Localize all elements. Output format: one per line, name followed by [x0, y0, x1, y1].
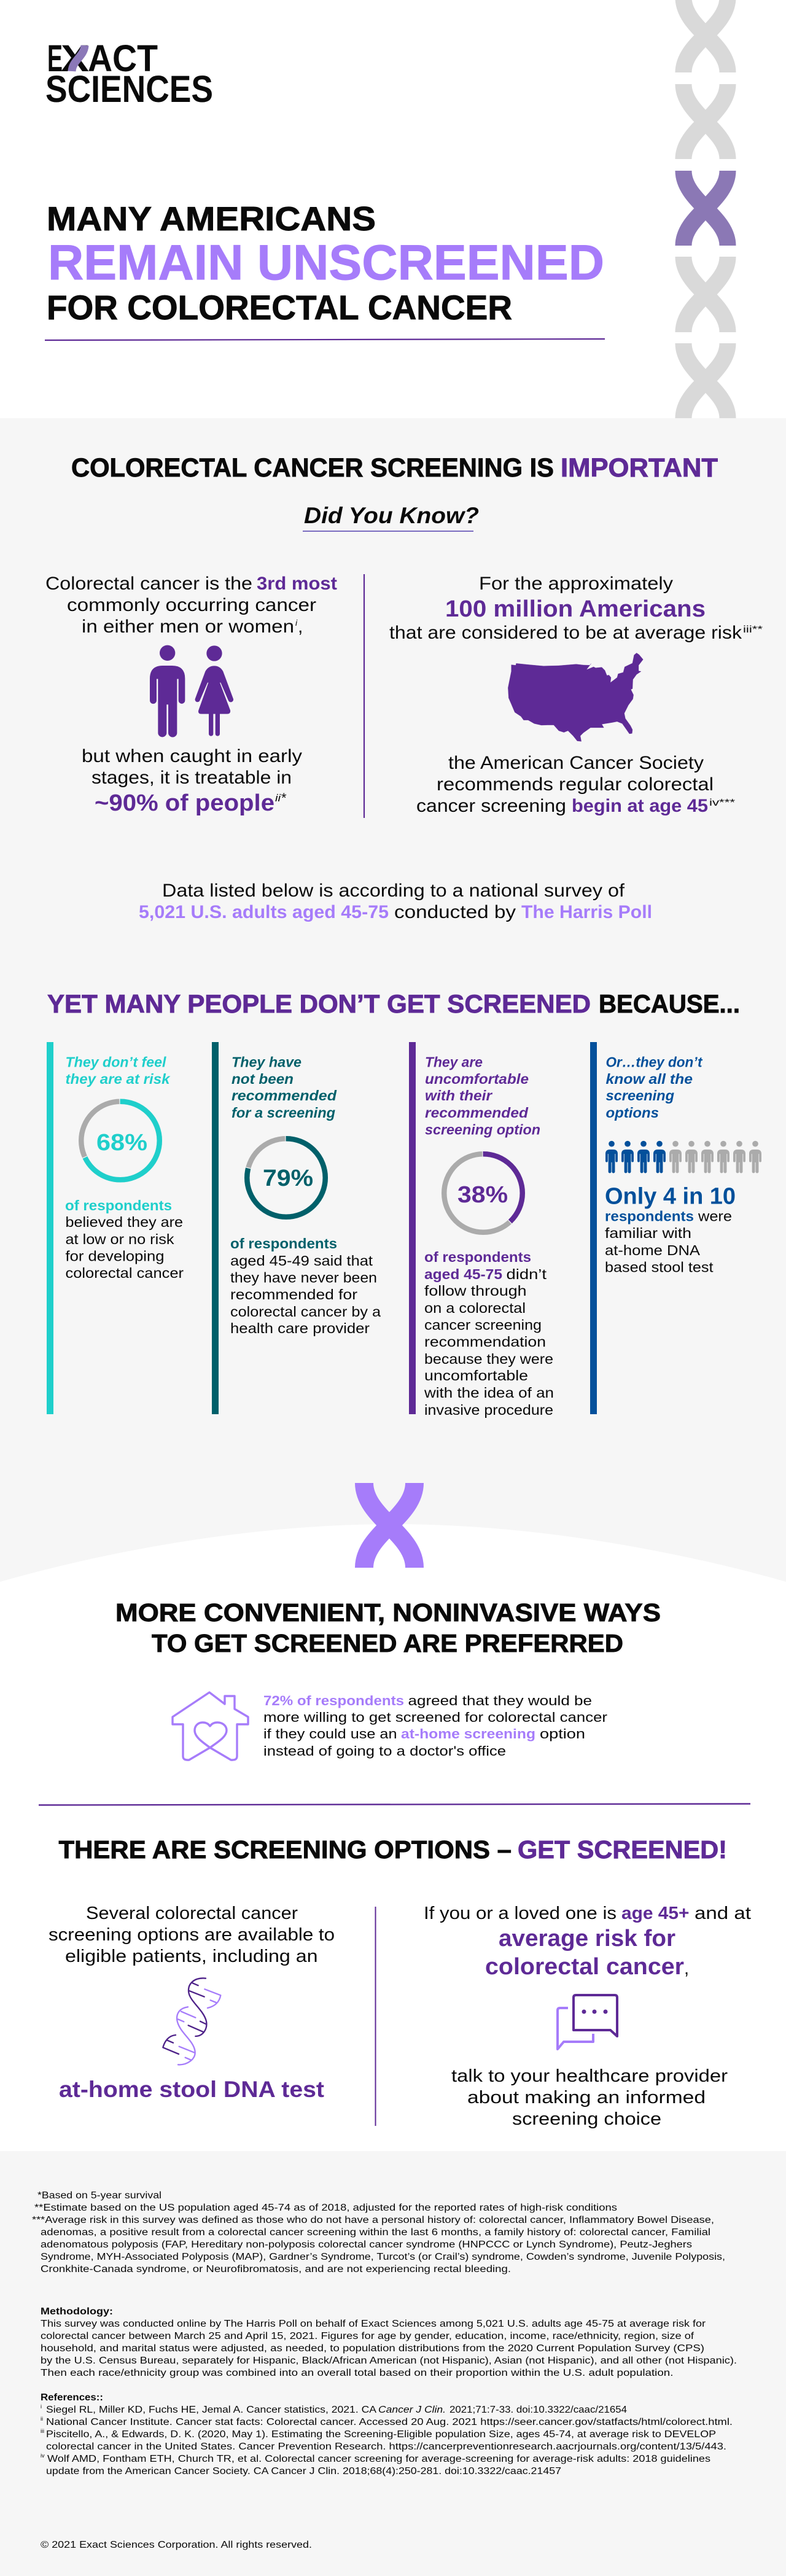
panel: not been recommended: colorectal cancer by a [230, 1304, 381, 1320]
footnotes [32, 2190, 725, 2274]
title [47, 200, 604, 327]
references: update from the American Cancer Society. CA Cancer J Clin. 2018;68(4):250-281. doi:10.3322/caac.21457 [46, 2466, 561, 2477]
text block: 72% of respondents: option [540, 1726, 585, 1741]
icon: DNA helix [163, 1978, 220, 2064]
panel: at-home stool DNA test: screening options are available to [49, 1925, 335, 1945]
panel: not been recommended: recommended for [230, 1286, 357, 1302]
text block: 72% of respondents: agreed that they would be [408, 1693, 592, 1708]
panel: don't know all options: Only 4 in 10 [605, 1184, 736, 1210]
panel: average risk facts: cancer screening [416, 796, 566, 816]
subheading: did you know: Did You Know? [304, 503, 479, 528]
footnotes: Cronkhite-Canada syndrome, or Neurofibromatosis, and are not experiencing rectal bleeding. [41, 2264, 511, 2274]
footnotes: ***Average risk in this survey was defined as those who do not have a personal history of: colorectal cancer, Inflammatory Bowel Disease, [32, 2215, 714, 2225]
panel: colorectal cancer facts [45, 574, 337, 816]
panel: uncomfortable with option: of respondents [424, 1249, 531, 1265]
panel: average risk facts: For the approximately [479, 574, 673, 594]
panel: uncomfortable with option: with the idea of an [424, 1385, 554, 1401]
panel: colorectal cancer facts: Colorectal cancer is the [45, 574, 252, 594]
logo: Exact Sciences: SCIENCES [45, 68, 213, 110]
panel: not been recommended: not been [232, 1071, 294, 1087]
text block: survey note: Data listed below is according to a national survey of [162, 881, 625, 901]
panel: don't know all options: screening [605, 1088, 674, 1103]
chart: 38% ring [444, 1154, 523, 1232]
chart: 79% ring [247, 1138, 325, 1217]
text block: survey note: conducted by [394, 902, 516, 922]
panel: they don't feel at risk: for developing [65, 1248, 165, 1264]
panel: don't know all options [590, 1042, 761, 1414]
panel: talk to your provider: age 45+ [621, 1904, 689, 1923]
panel: don't know all options: Or…they don’t [605, 1054, 703, 1070]
icon: US map [508, 653, 643, 741]
logo: Exact Sciences [45, 37, 213, 110]
panel: they don't feel at risk: They don’t feel [65, 1054, 166, 1070]
text block: survey note [139, 881, 652, 922]
panel: colorectal cancer facts: * [281, 790, 287, 806]
panel: uncomfortable with option: invasive procedure [424, 1402, 553, 1418]
panel: uncomfortable with option: recommended [425, 1105, 529, 1121]
footnotes: adenomatous polyposis (FAP, Hereditary non-polyposis colorectal cancer syndrome (HNPCCC or Lynch Syndrome), Peutz-Jeghers [41, 2239, 692, 2250]
chart: 68% ring [81, 1102, 160, 1180]
panel: colorectal cancer facts: commonly occurring cancer [67, 595, 316, 615]
panel: don't know all options: options [605, 1105, 659, 1121]
heading: there are screening options: THERE ARE SCREENING OPTIONS – [59, 1835, 512, 1864]
text block: 72% of respondents: if they could use an [263, 1726, 397, 1741]
DNA strip decoration [683, 0, 728, 418]
panel: not been recommended: aged 45-49 said that [230, 1253, 373, 1269]
panel: don't know all options: know all the [605, 1071, 693, 1087]
methodology: colorectal cancer between March 25 and April 15, 2021. Figures for age by gender, education, income, race/ethnicity, region, size of [41, 2331, 695, 2341]
panel: uncomfortable with option: screening option [425, 1121, 540, 1137]
heading: more convenient: TO GET SCREENED ARE PREFERRED [152, 1629, 623, 1657]
methodology: Methodology: [41, 2306, 113, 2317]
panel: talk to your provider: colorectal cancer [485, 1954, 684, 1980]
panel: uncomfortable with option: recommendation [424, 1334, 546, 1350]
chart: 68% ring: 68% [96, 1130, 147, 1156]
panel: not been recommended: They have [232, 1054, 302, 1070]
panel: uncomfortable with option: follow through [424, 1283, 527, 1299]
footer background [0, 2151, 786, 2576]
panel: not been recommended: of respondents [230, 1235, 337, 1251]
references: 2021;71:7-33. doi:10.3322/caac/21654 [449, 2405, 627, 2415]
logo: Exact Sciences: X [61, 37, 89, 79]
footnotes: adenomas, a positive result from a colorectal cancer screening within the last 6 months, a family history of: colorectal cancer, Familial [41, 2227, 710, 2238]
panel: talk to your provider [424, 1904, 751, 2129]
panel: at-home stool DNA test [49, 1904, 335, 2102]
heading: screening is important: IMPORTANT [561, 453, 718, 483]
section background: white curve [0, 1524, 786, 1597]
panel: not been recommended: for a screening [232, 1105, 335, 1121]
text block: 72% of respondents: more willing to get screened for colorectal cancer [263, 1710, 607, 1725]
panel: talk to your provider: , [684, 1959, 689, 1979]
panel: average risk facts: iv*** [709, 798, 735, 808]
panel: not been recommended: recommended [232, 1088, 337, 1103]
chart: 38% ring: 38% [457, 1182, 508, 1208]
references: Cancer J Clin. [378, 2405, 446, 2415]
panel: average risk facts: begin at age 45 [572, 796, 708, 816]
section background: important [0, 418, 786, 1582]
references [41, 2392, 733, 2477]
title: FOR COLORECTAL CANCER [47, 288, 512, 327]
panel: uncomfortable with option [409, 1042, 554, 1418]
panel: colorectal cancer facts: 3rd most [257, 574, 337, 594]
panel: don't know all options: respondents [605, 1208, 694, 1224]
references: iii [41, 2428, 44, 2434]
references: Wolf AMD, Fontham ETH, Church TR, et al. Colorectal cancer screening for average-screening for average-risk adults: 2018 guidelines [47, 2454, 710, 2464]
heading: yet many people: BECAUSE... [599, 989, 740, 1018]
panel: colorectal cancer facts: ~90% of people [95, 790, 274, 816]
references: Piscitello, A., & Edwards, D. K. (2020, May 1). Estimating the Screening-Eligible population Size, ages 45-74, at average risk to DEVELOP [46, 2429, 716, 2440]
panel: uncomfortable with option: because they were [424, 1351, 553, 1367]
panel: uncomfortable with option: didn’t [506, 1266, 547, 1282]
panel: at-home stool DNA test: eligible patients, including an [65, 1947, 318, 1966]
panel: colorectal cancer facts: , [298, 617, 303, 637]
panel: don't know all options: based stool test [605, 1259, 714, 1275]
heading: more convenient: MORE CONVENIENT, NONINVASIVE WAYS [115, 1598, 661, 1627]
panel: don't know all options: were [698, 1208, 732, 1224]
logo: Exact Sciences: ACT [88, 37, 158, 79]
methodology: household, and marital status were adjusted, as needed, to population distributions from the 2020 Current Population Survey (CPS) [41, 2343, 704, 2354]
text block: 72% of respondents: instead of going to a doctor's office [263, 1743, 506, 1759]
title underline [45, 339, 605, 340]
panel: uncomfortable with option: aged 45-75 [424, 1266, 502, 1282]
panel: talk to your provider: screening choice [512, 2109, 661, 2129]
heading: screening is important: COLORECTAL CANCER SCREENING IS [71, 453, 554, 483]
methodology: by the U.S. Census Bureau, separately for Hispanic, Black/African American (not Hispanic), Asian (not Hispanic), and all other (not Hispanic). [41, 2356, 737, 2366]
text block: survey note: 5,021 U.S. adults aged 45-75 [139, 902, 389, 922]
panel: talk to your provider: and at [695, 1904, 751, 1923]
logo: Exact Sciences: E [47, 37, 63, 79]
panel: average risk facts: the American Cancer Society [448, 753, 704, 773]
heading: yet many people: YET MANY PEOPLE DON’T GET SCREENED [47, 989, 591, 1018]
heading: more convenient [115, 1598, 661, 1657]
panel: colorectal cancer facts: but when caught in early [82, 746, 302, 766]
footnotes: Syndrome, MYH-Associated Polyposis (MAP), Gardner’s Syndrome, Turcot’s (or Crail’s) syndrome, Cowden’s syndrome, Juvenile Polyposis, [41, 2252, 725, 2262]
text block: 72% of respondents: 72% of respondents [263, 1693, 404, 1708]
title: REMAIN UNSCREENED [48, 235, 604, 290]
panel: talk to your provider: about making an informed [467, 2088, 706, 2107]
panel: they don't feel at risk: at low or no risk [65, 1231, 174, 1247]
divider: screening columns [375, 1907, 376, 2126]
icon: speech bubbles [558, 1995, 617, 2049]
footnotes: *Based on 5-year survival [37, 2190, 161, 2201]
panel: average risk facts [389, 574, 763, 816]
methodology: Then each race/ethnicity group was combined into an overall total based on their proportion within the U.S. adult population. [41, 2368, 673, 2378]
panel: colorectal cancer facts: i [295, 618, 298, 628]
panel: average risk facts: recommends regular colorectal [437, 774, 714, 795]
methodology: This survey was conducted online by The Harris Poll on behalf of Exact Sciences among 5,021 U.S. adults age 45-75 at average risk for [41, 2319, 706, 2329]
icon: house with heart [173, 1692, 248, 1760]
panel: average risk facts: 100 million Americans [445, 596, 706, 622]
pictogram: 4 in 10 people [605, 1141, 761, 1173]
references: ii [41, 2416, 43, 2422]
panel: colorectal cancer facts: stages, it is treatable in [91, 768, 292, 788]
panel: average risk facts: iii** [743, 625, 763, 635]
panel: they don't feel at risk [47, 1042, 184, 1414]
panel: at-home stool DNA test: Several colorectal cancer [86, 1904, 298, 1923]
heading: there are screening options [59, 1835, 727, 1864]
heading: there are screening options: GET SCREENED! [518, 1835, 727, 1864]
panel: colorectal cancer facts: ii [275, 792, 281, 804]
panel: uncomfortable with option: with their [425, 1088, 492, 1103]
panel: uncomfortable with option: cancer screening [424, 1317, 542, 1333]
panel: they don't feel at risk: believed they are [65, 1214, 183, 1230]
panel: not been recommended: health care provider [230, 1320, 370, 1336]
panel: talk to your provider: talk to your healthcare provider [451, 2066, 728, 2086]
panel: uncomfortable with option: uncomfortable [425, 1071, 529, 1087]
panel: don't know all options: at-home DNA [605, 1242, 701, 1258]
panel: they don't feel at risk: colorectal cancer [65, 1265, 184, 1281]
references: Siegel RL, Miller KD, Fuchs HE, Jemal A. Cancer statistics, 2021. CA [46, 2405, 377, 2415]
methodology [41, 2306, 737, 2378]
text block: 72% of respondents [263, 1693, 607, 1759]
section divider [39, 1804, 750, 1805]
text block: 72% of respondents: at-home screening [401, 1726, 535, 1741]
panel: uncomfortable with option: They are [425, 1054, 483, 1070]
panel: not been recommended [212, 1042, 381, 1414]
divider: facts columns [364, 574, 365, 818]
panel: they don't feel at risk: they are at risk [65, 1071, 171, 1087]
panel: talk to your provider: average risk for [499, 1926, 675, 1951]
panel: not been recommended: they have never been [230, 1270, 377, 1286]
panel: uncomfortable with option: on a colorectal [424, 1300, 526, 1316]
panel: at-home stool DNA test: at-home stool DNA test [59, 2077, 324, 2102]
icon: man and woman [150, 645, 233, 737]
panel: don't know all options: familiar with [605, 1225, 691, 1241]
text block: survey note: The Harris Poll [521, 902, 652, 922]
panel: uncomfortable with option: uncomfortable [424, 1368, 528, 1383]
copyright: © 2021 Exact Sciences Corporation. All rights reserved. [41, 2540, 312, 2550]
references: References:: [41, 2392, 103, 2403]
panel: colorectal cancer facts: in either men or women [82, 617, 294, 637]
references: i [41, 2403, 42, 2410]
icon: large DNA X [364, 1483, 414, 1568]
references: iv [41, 2453, 45, 2459]
panel: average risk facts: that are considered to be at average risk [389, 623, 742, 643]
chart: 79% ring: 79% [263, 1165, 313, 1191]
title: MANY AMERICANS [47, 200, 376, 238]
references: National Cancer Institute. Cancer stat facts: Colorectal cancer. Accessed 20 Aug. 2021 https://seer.cancer.gov/statfacts/html/colorect.html. [46, 2417, 733, 2427]
references: colorectal cancer in the United States. Cancer Prevention Research. https://cancerpreventionresearch.aacrjournals.org/content/13/5/443. [46, 2442, 726, 2452]
footnotes: **Estimate based on the US population aged 45-74 as of 2018, adjusted for the reported rates of high-risk conditions [34, 2203, 617, 2213]
panel: they don't feel at risk: of respondents [65, 1197, 172, 1213]
panel: talk to your provider: If you or a loved one is [424, 1904, 617, 1923]
